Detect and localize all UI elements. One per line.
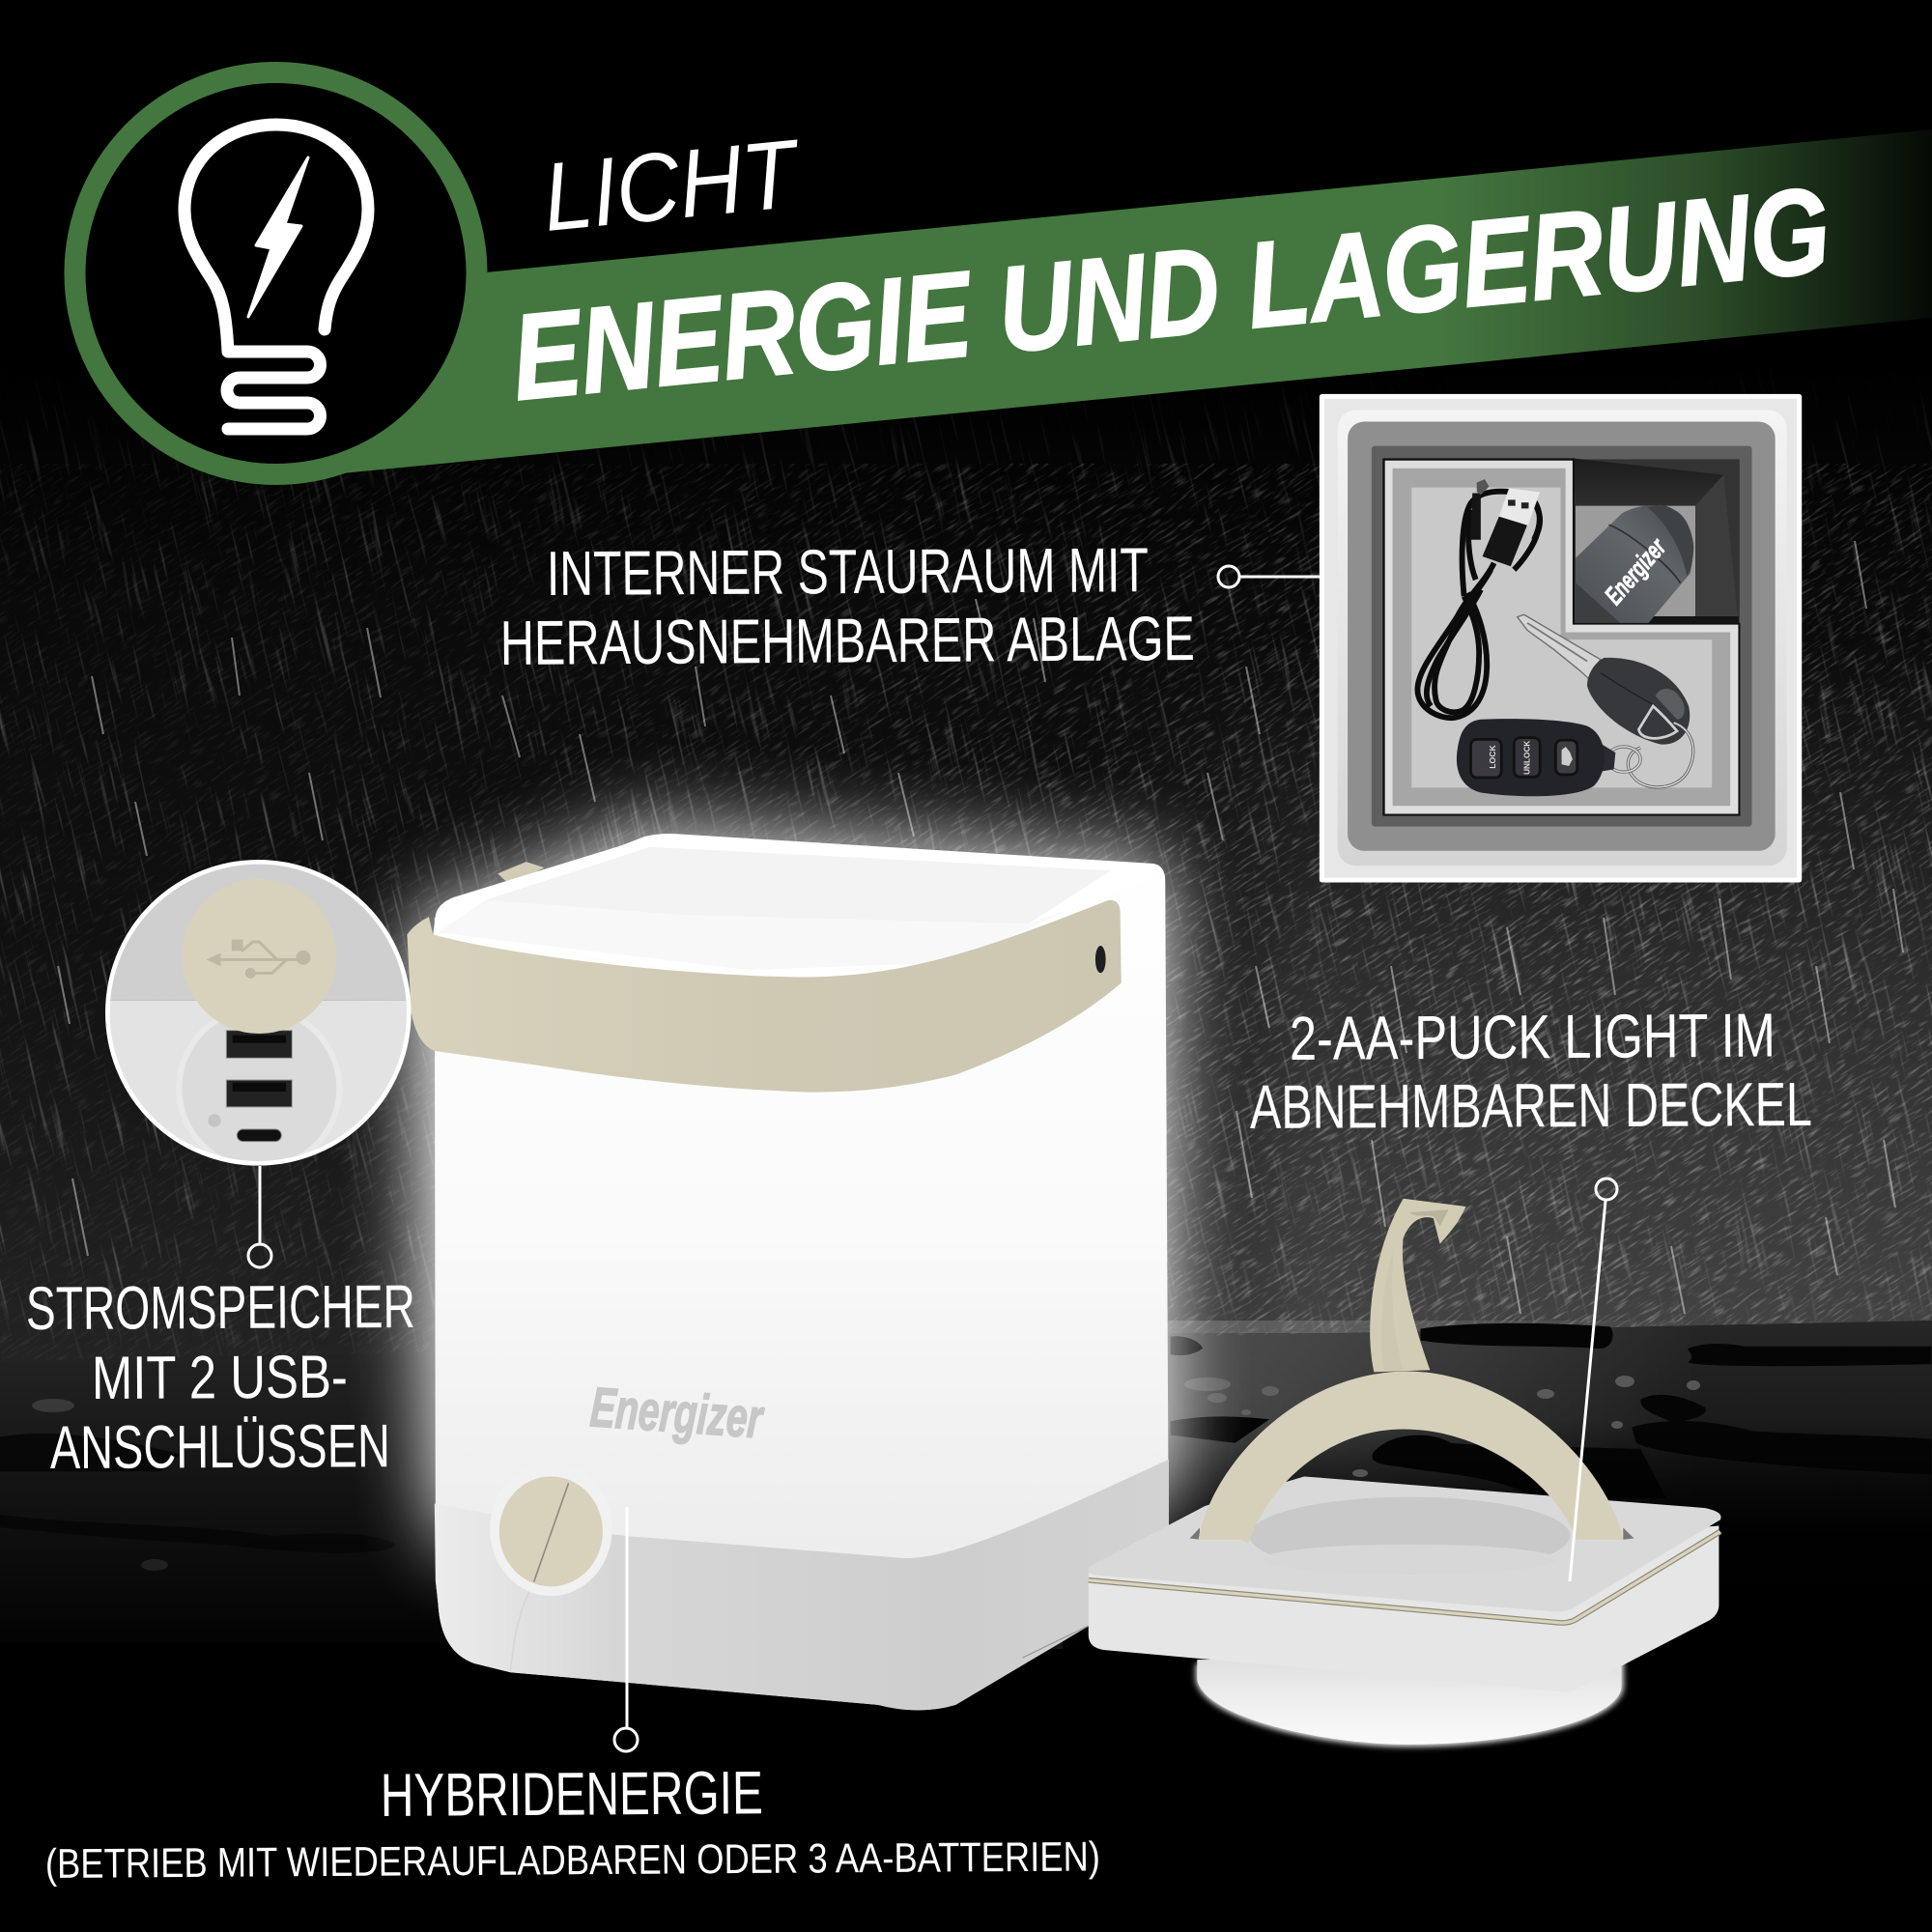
carry handle [407, 900, 1122, 1093]
connector: hybrid energy callout [614, 1507, 638, 1751]
connector: USB callout [248, 1166, 271, 1267]
label: internal storage [500, 534, 1195, 678]
heading: LICHT: LICHT [538, 119, 806, 252]
lid top face [1088, 1476, 1721, 1611]
USB-A port [226, 1031, 292, 1058]
compartment: flashlight bay [1574, 458, 1740, 626]
puck light glow [1196, 1656, 1623, 1747]
label: hybrid energy [45, 1759, 1100, 1888]
arc handle [1199, 1372, 1623, 1544]
icon: car key [1518, 614, 1690, 745]
icon: detachable lid with puck light [1088, 1199, 1721, 1745]
removable tray [1382, 458, 1740, 816]
icon: USB cable [1417, 479, 1540, 718]
lantern body [435, 834, 1169, 1710]
USB cap [182, 879, 336, 1034]
hook [1370, 1199, 1465, 1372]
label: hybrid energy: HYBRIDENERGIE [381, 1759, 763, 1830]
beige seam [1089, 1532, 1720, 1623]
puddles on table [1171, 1323, 1931, 1498]
green ribbon [280, 129, 1932, 483]
label: internal storage: INTERNER STAURAUM MIT [547, 534, 1149, 609]
label: power bank: STROMSPEICHER [26, 1273, 415, 1343]
USB-A port [226, 1080, 292, 1107]
connector: puck light callout [1570, 1179, 1617, 1581]
label: power bank [26, 1273, 415, 1482]
label: power bank: MIT 2 USB- [92, 1344, 348, 1412]
icon: remote fob [1457, 719, 1693, 796]
handle back [497, 862, 544, 886]
base band [435, 1460, 1169, 1710]
dial [490, 1463, 612, 1596]
icon: lantern [407, 834, 1169, 1710]
label: puck light: 2-AA-PUCK LIGHT IM [1290, 1000, 1776, 1073]
label: internal storage: HERAUSNEHMBARER ABLAGE [500, 603, 1195, 678]
logo: Energizer on lantern: Energizer [588, 1376, 766, 1451]
lid [433, 835, 1156, 979]
USB-C port [237, 1129, 281, 1142]
icon: flashlight: Energizer [1599, 532, 1672, 611]
panel: USB ports inset [106, 860, 412, 1172]
puck lens [1197, 1656, 1622, 1745]
label: power bank: ANSCHLÜSSEN [50, 1412, 390, 1482]
icon: flashlight [1574, 505, 1693, 625]
label: puck light [1250, 1000, 1812, 1142]
panel: storage compartment photo [1320, 394, 1802, 882]
title banner [280, 119, 1932, 483]
icon: light bulb in green ring [75, 72, 477, 474]
lantern glow [407, 829, 1173, 1557]
lid side walls [1089, 1525, 1719, 1691]
label: hybrid energy: (BETRIEB MIT WIEDERAUFLADBAREN ODER 3 AA-BATTERIEN) [45, 1833, 1100, 1888]
connector: storage callout [1218, 566, 1321, 587]
icon: remote fob: UNLOCK [1522, 741, 1531, 775]
icon: remote fob: LOCK [1488, 745, 1497, 769]
lid recess [1190, 1497, 1634, 1575]
